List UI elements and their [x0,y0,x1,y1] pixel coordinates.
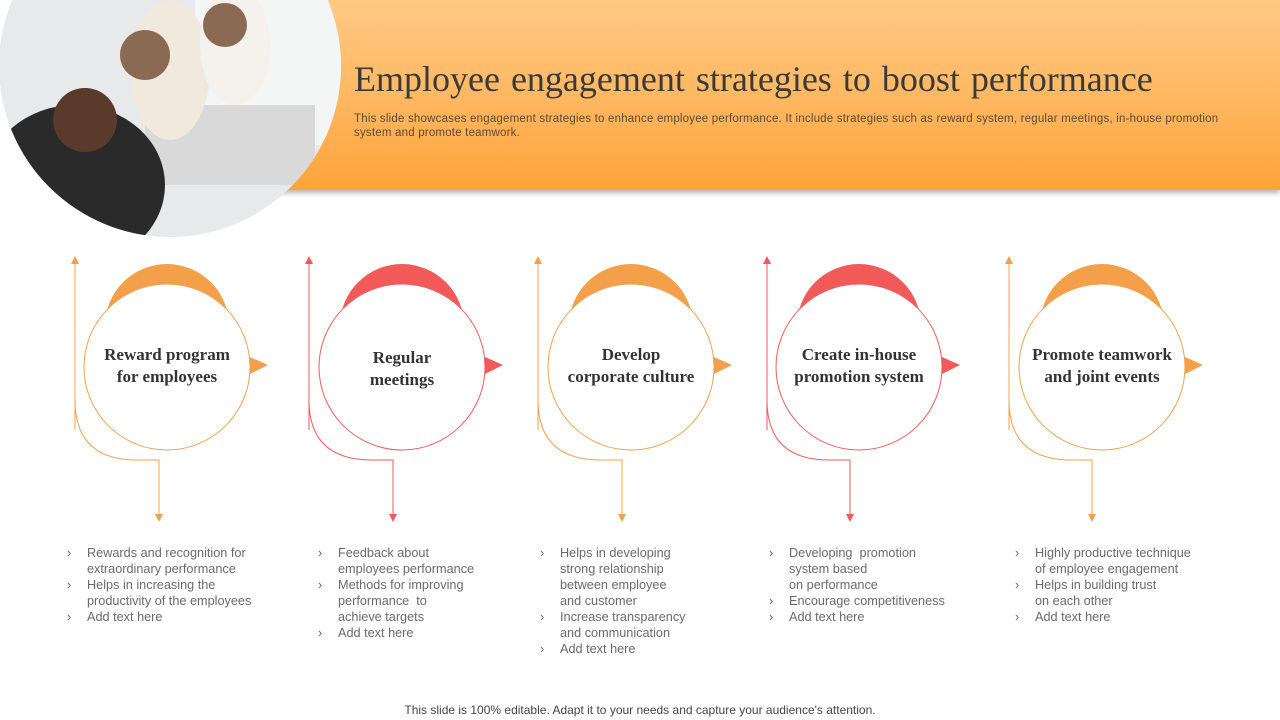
unit 4: promotion system [794,367,924,386]
bullets 2: Add text here [338,626,413,640]
bullets 1: productivity of the employees [87,594,251,608]
unit 4: Create in-house [802,345,917,364]
bullets 3: strong relationship [560,562,664,576]
bullets 2: Feedback about [338,546,429,560]
bullets 2: Methods for improving [338,578,464,592]
bullets 3 [540,546,686,656]
bullets 1: Helps in increasing the [87,578,215,592]
bullets 3: Helps in developing [560,546,671,560]
strategy diagram [71,256,1203,522]
bullets 4: Add text here [789,610,864,624]
unit 4 [767,260,960,518]
bullets 3: and communication [560,626,670,640]
bullets 5: Highly productive technique [1035,546,1191,560]
bullets 3: and customer [560,594,637,608]
subtitle: system and promote teamwork. [354,127,520,139]
bullets 4: on performance [789,578,878,592]
bullets 1 [68,546,251,624]
title: Employee engagement strategies to boost performance [354,59,1153,99]
unit 1: for employees [117,367,217,386]
bullets 1: Add text here [87,610,162,624]
unit 5: Promote teamwork [1032,345,1172,364]
header band [270,0,1280,190]
bullets 4: system based [789,562,867,576]
unit 2 [309,260,503,518]
bullets 2: performance to [338,594,427,608]
footer: This slide is 100% editable. Adapt it to your needs and capture your audience's attention. [404,703,876,717]
bullets 3: Add text here [560,642,635,656]
unit 3: Develop [602,345,660,364]
bullets 5: of employee engagement [1035,562,1178,576]
bullets 1: extraordinary performance [87,562,236,576]
bullets 2: employees performance [338,562,474,576]
subtitle [354,113,1218,139]
bullets 3: between employee [560,578,667,592]
bullets 5 [1016,546,1191,624]
bullets 4: Developing promotion [789,546,916,560]
bullets 2 [318,546,474,640]
unit 5 [1009,260,1203,518]
unit 3: corporate culture [568,367,695,386]
bullets 1: Rewards and recognition for [87,546,246,560]
bullets 4: Encourage competitiveness [789,594,945,608]
unit 3 [538,260,732,518]
bullets 5: Add text here [1035,610,1110,624]
subtitle: This slide showcases engagement strategies to enhance employee performance. It include strategies such as reward system, regular meetings, in-house promotion [354,113,1218,125]
bullets 5: on each other [1035,594,1113,608]
unit 2: meetings [370,370,434,389]
unit 2: Regular [373,348,432,367]
photo circle [0,0,341,237]
unit 5: and joint events [1044,367,1160,386]
unit 1 [75,260,268,518]
bullets 4 [770,546,945,624]
bullets 3: Increase transparency [560,610,686,624]
bullets 5: Helps in building trust [1035,578,1156,592]
bullets 2: achieve targets [338,610,424,624]
unit 1: Reward program [104,345,230,364]
